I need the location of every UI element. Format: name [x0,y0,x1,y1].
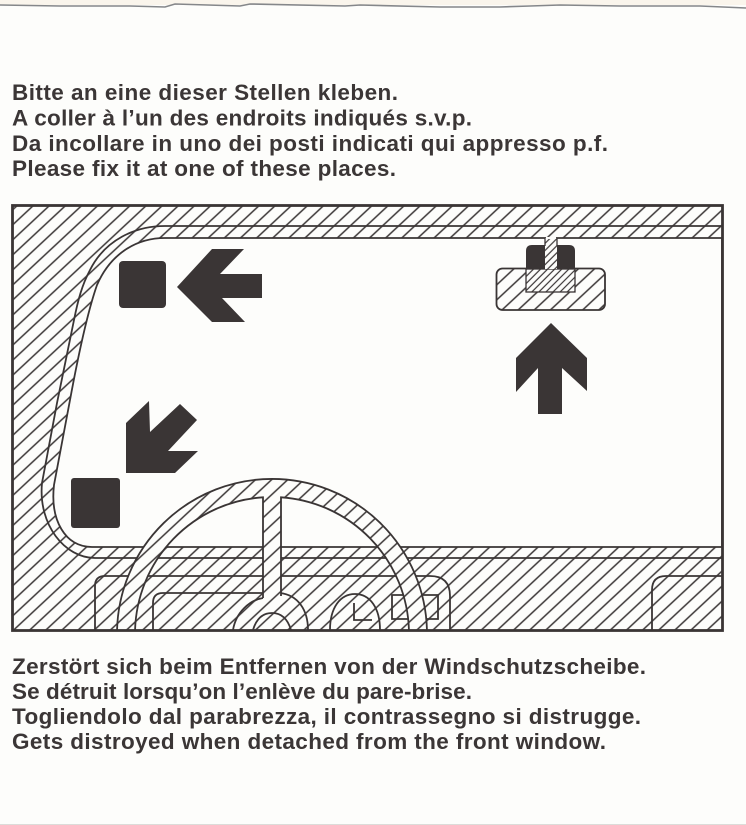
destruction notice text block [12,654,646,754]
destruction notice text block: Togliendolo dal parabrezza, il contrassegno si distrugge. [12,704,641,729]
dashboard switch [392,595,438,619]
clock [330,594,380,630]
frame border [12,206,722,630]
instruction text block: A coller à l’un des endroits indiqués s.v.p. [12,106,472,130]
hatched car interior background [13,206,722,630]
destruction notice text block: Gets distroyed when detached from the front window. [12,729,606,754]
placement square lower left [71,478,120,528]
steering wheel [117,479,427,630]
instruction text block [12,80,608,181]
destruction notice text block: Se détruit lorsqu’on l’enlève du pare-brise. [12,679,472,704]
placement square upper left [119,261,166,308]
rear-view mirror [496,238,605,310]
dashboard lines and panels [95,576,722,630]
arrow pointing down left [126,401,198,473]
arrow pointing left [177,249,262,322]
windshield glass area [53,238,722,547]
instruction text block: Da incollare in uno dei posti indicati qui appresso p.f. [12,131,608,156]
instruction text block: Bitte an eine dieser Stellen kleben. [12,80,398,105]
windshield outer seal line [42,226,722,558]
instruction text block: Please fix it at one of these places. [12,156,396,181]
destruction notice text block: Zerstört sich beim Entfernen von der Windschutzscheibe. [12,654,646,679]
windshield diagram panel [12,206,722,630]
arrow pointing up [516,323,587,414]
